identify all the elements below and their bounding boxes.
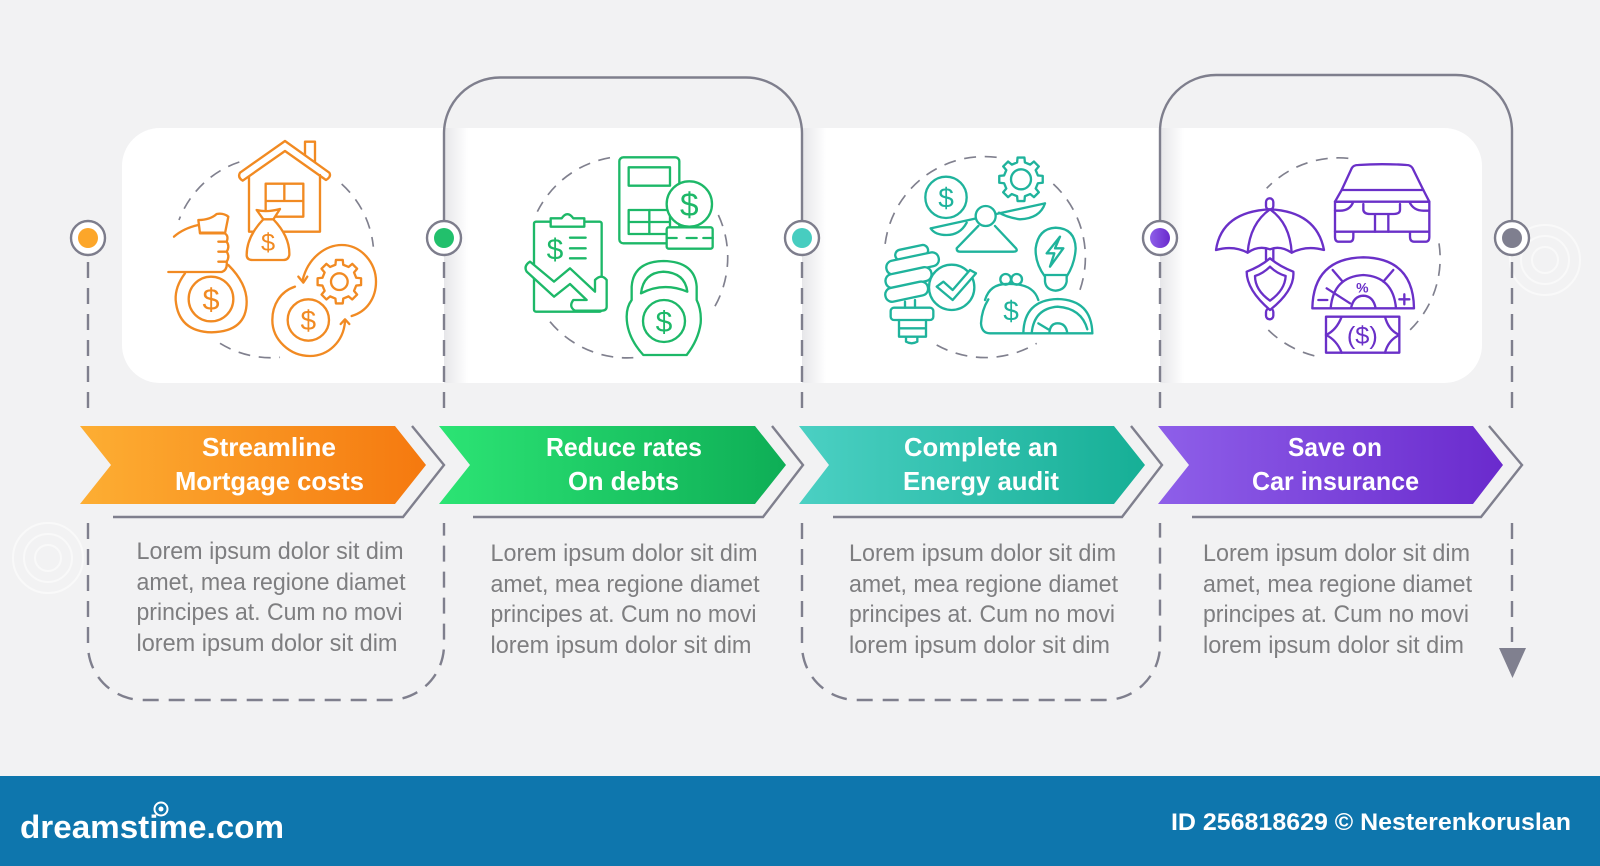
text block: step 4: Lorem ipsum dolor sit dim <box>1203 540 1470 567</box>
text block: step 2: principes at. Cum no movi <box>490 601 756 628</box>
footer bar <box>0 776 1600 866</box>
arrow step 2: reduce rates on debts <box>439 426 803 517</box>
text block: step 4: amet, mea regione diamet <box>1203 571 1472 598</box>
icon: debts: $ <box>547 233 564 266</box>
text block: step 3: amet, mea regione diamet <box>849 571 1118 598</box>
text block: step 1: amet, mea regione diamet <box>136 569 406 596</box>
arrowhead: end of timeline <box>1499 648 1526 678</box>
icon: car insurance: % <box>1356 279 1369 295</box>
arrow step 3: complete an energy audit <box>799 426 1162 517</box>
heading: step 1: Mortgage costs <box>175 466 364 496</box>
heading: step 3: Energy audit <box>903 466 1059 496</box>
text block: step 2: Lorem ipsum dolor sit dim <box>490 540 758 567</box>
node 2 <box>427 221 461 255</box>
node 5 <box>1495 221 1529 255</box>
heading: step 2 <box>546 432 702 496</box>
icon: energy audit <box>884 157 1092 358</box>
icon: mortgage costs: $ <box>202 283 220 317</box>
icon: mortgage costs: $ <box>261 229 275 257</box>
heading: step 3 <box>903 432 1059 496</box>
icon: mortgage costs <box>168 141 376 358</box>
node 3 <box>785 221 819 255</box>
arrow step 4: save on car insurance <box>1158 426 1522 517</box>
icon: debts <box>526 157 728 358</box>
text block: step 3: Lorem ipsum dolor sit dim <box>849 540 1116 567</box>
icon: energy audit: $ <box>938 182 954 213</box>
text block: step 1: lorem ipsum dolor sit dim <box>136 630 398 657</box>
text block: step 2 <box>490 540 760 659</box>
text block: step 2: amet, mea regione diamet <box>490 571 760 598</box>
text block: step 1: Lorem ipsum dolor sit dim <box>136 538 404 565</box>
text block: step 4 <box>1203 540 1472 659</box>
text block: step 3: lorem ipsum dolor sit dim <box>849 632 1110 659</box>
icon: mortgage costs: $ <box>301 305 317 336</box>
text block: step 3 <box>849 540 1118 659</box>
arrow step 1: streamline mortgage costs <box>80 426 444 517</box>
heading: step 1 <box>175 432 364 496</box>
heading: step 4: Car insurance <box>1252 466 1419 496</box>
text block: step 2: lorem ipsum dolor sit dim <box>490 632 752 659</box>
icon: debts: $ <box>680 187 699 224</box>
text block: step 4: principes at. Cum no movi <box>1203 601 1469 628</box>
text block: step 1 <box>136 538 406 657</box>
heading: step 4: Save on <box>1288 432 1382 462</box>
heading: step 4 <box>1252 432 1419 496</box>
text block: step 3: principes at. Cum no movi <box>849 601 1115 628</box>
text block: step 1: principes at. Cum no movi <box>136 599 402 626</box>
heading: step 2: On debts <box>568 466 679 496</box>
heading: step 3: Complete an <box>904 432 1058 462</box>
heading: step 1: Streamline <box>202 432 336 462</box>
logo: dreamstime.com: dreamstime.com <box>20 809 284 845</box>
icon: debts: $ <box>656 306 673 339</box>
timeline connectors <box>88 75 1512 700</box>
node 4 <box>1143 221 1177 255</box>
icon: car insurance: ($) <box>1347 322 1378 350</box>
node 1 <box>71 221 105 255</box>
image credit: ID 256818629 © Nesterenkoruslan <box>1171 809 1571 836</box>
icon: energy audit: $ <box>1003 296 1019 327</box>
text block: step 4: lorem ipsum dolor sit dim <box>1203 632 1464 659</box>
heading: step 2: Reduce rates <box>546 432 702 462</box>
panel: white icon band <box>122 128 1482 383</box>
icon: car insurance <box>1216 158 1440 357</box>
